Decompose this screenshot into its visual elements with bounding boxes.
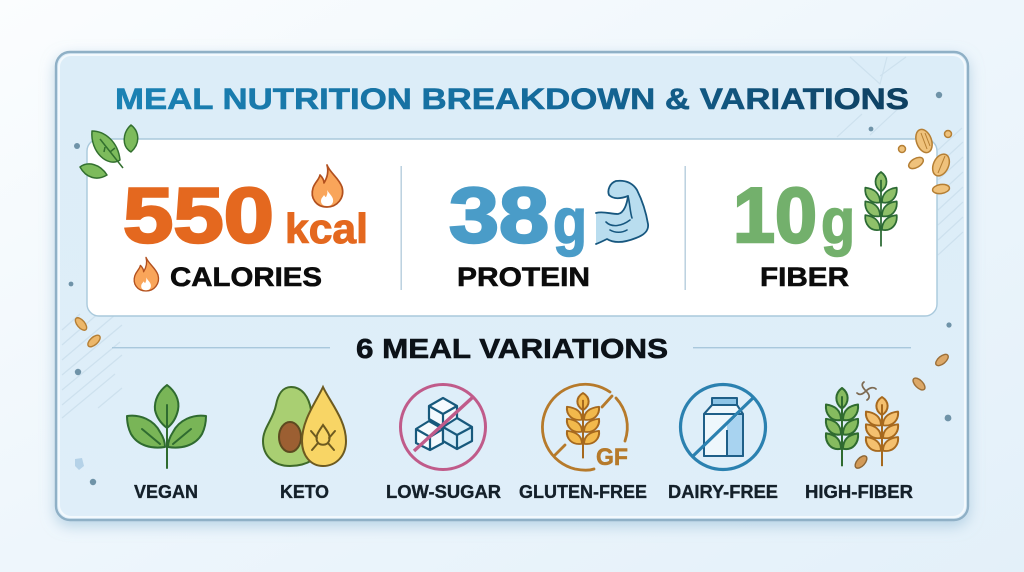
variation: keto [263, 387, 346, 502]
label: LOW-SUGAR [386, 482, 501, 502]
icon: leaves top left [80, 125, 138, 178]
decorative dots [69, 92, 952, 485]
calories label: CALORIES [170, 262, 322, 292]
variation: dairy-free [668, 384, 778, 502]
icon: grains right [911, 352, 950, 392]
icon: prohibition ring [680, 384, 766, 470]
icon: wheat [865, 172, 897, 246]
divider [400, 166, 402, 290]
icon: flame small [134, 257, 159, 291]
panel: nutrition stats [87, 139, 937, 316]
section heading: 6 MEAL VARIATIONS [356, 333, 668, 364]
label: DAIRY-FREE [668, 482, 778, 502]
icon: flame large [312, 165, 343, 207]
protein value: 38 [449, 171, 549, 259]
icon: seed [853, 454, 869, 470]
variation: low-sugar [386, 384, 501, 502]
main panel [56, 52, 968, 520]
protein value [449, 171, 587, 259]
label: HIGH-FIBER [805, 482, 913, 502]
icon: crossed ring [542, 384, 627, 470]
divider [684, 166, 686, 290]
icon: milk carton [704, 398, 743, 456]
fiber value: g [821, 185, 855, 257]
icon: swirl [857, 382, 876, 400]
fiber label: FIBER [760, 262, 849, 292]
variation: gluten-free [519, 384, 647, 502]
variation: high-fiber [805, 382, 913, 502]
variation: vegan [127, 385, 206, 502]
title: MEAL NUTRITION BREAKDOWN & VARIATIONS [115, 83, 909, 116]
icon: flexed arm [596, 181, 648, 244]
label: GLUTEN-FREE [519, 482, 647, 502]
label: KETO [280, 482, 329, 502]
icon: orange wheat [866, 397, 898, 466]
calories unit: kcal [285, 205, 368, 252]
divider line right [693, 347, 911, 348]
icon: sugar cubes [416, 398, 472, 450]
GF mark: GF [596, 444, 628, 471]
divider line left [112, 347, 330, 348]
icon: sprout [127, 385, 206, 468]
icon: avocado [263, 387, 322, 466]
icon: oil drop [302, 387, 346, 466]
icon: wheat [567, 393, 599, 458]
icon: grains left [73, 316, 102, 349]
icon: grains top right [898, 127, 953, 195]
protein label: PROTEIN [457, 262, 590, 292]
fiber value: 10 [733, 171, 817, 259]
calories value: 550 [123, 171, 274, 259]
icon: prohibition ring [400, 384, 486, 470]
icon: green wheat [826, 388, 858, 466]
protein value: g [553, 185, 587, 257]
label: VEGAN [134, 482, 198, 502]
